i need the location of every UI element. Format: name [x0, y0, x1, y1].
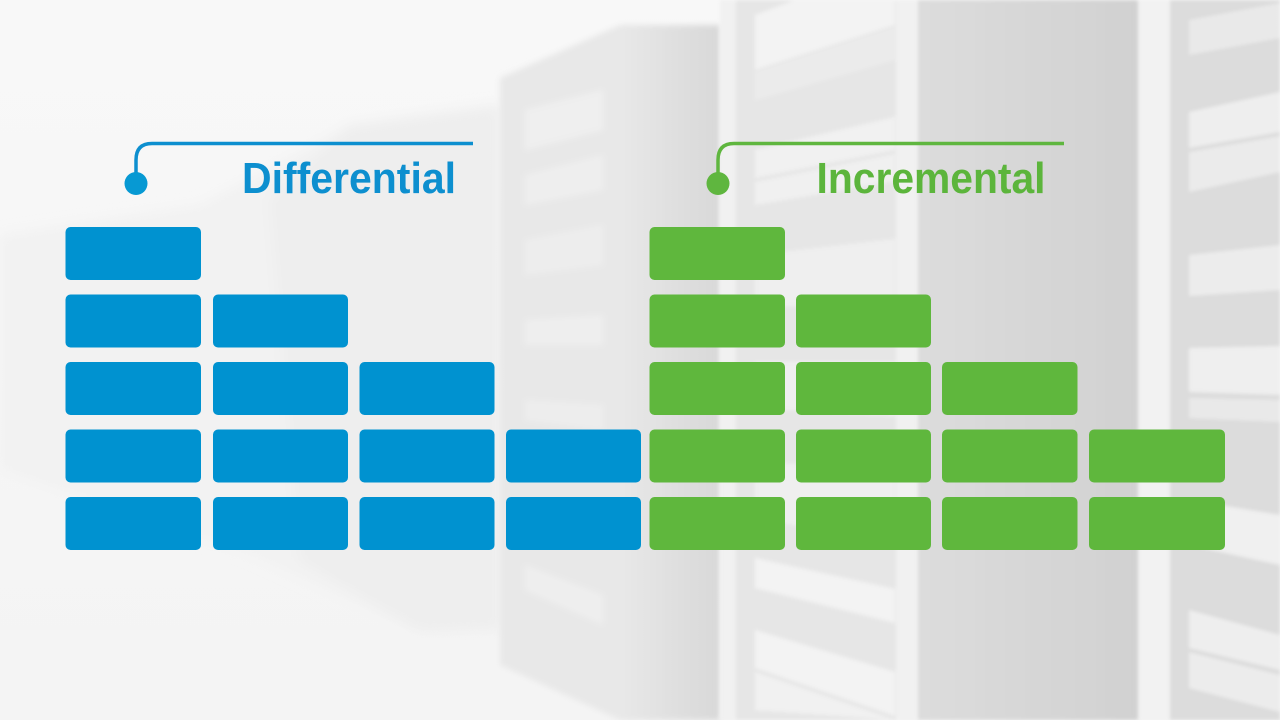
incremental connector with dot	[706, 144, 1064, 195]
heading: differential: Differential	[242, 154, 456, 203]
differential connector with dot	[124, 144, 473, 195]
panel: differential	[66, 144, 641, 550]
differential block stack	[66, 227, 641, 550]
heading: incremental: Incremental	[816, 154, 1046, 203]
incremental block stack	[650, 227, 1225, 550]
panel: incremental	[650, 144, 1225, 550]
